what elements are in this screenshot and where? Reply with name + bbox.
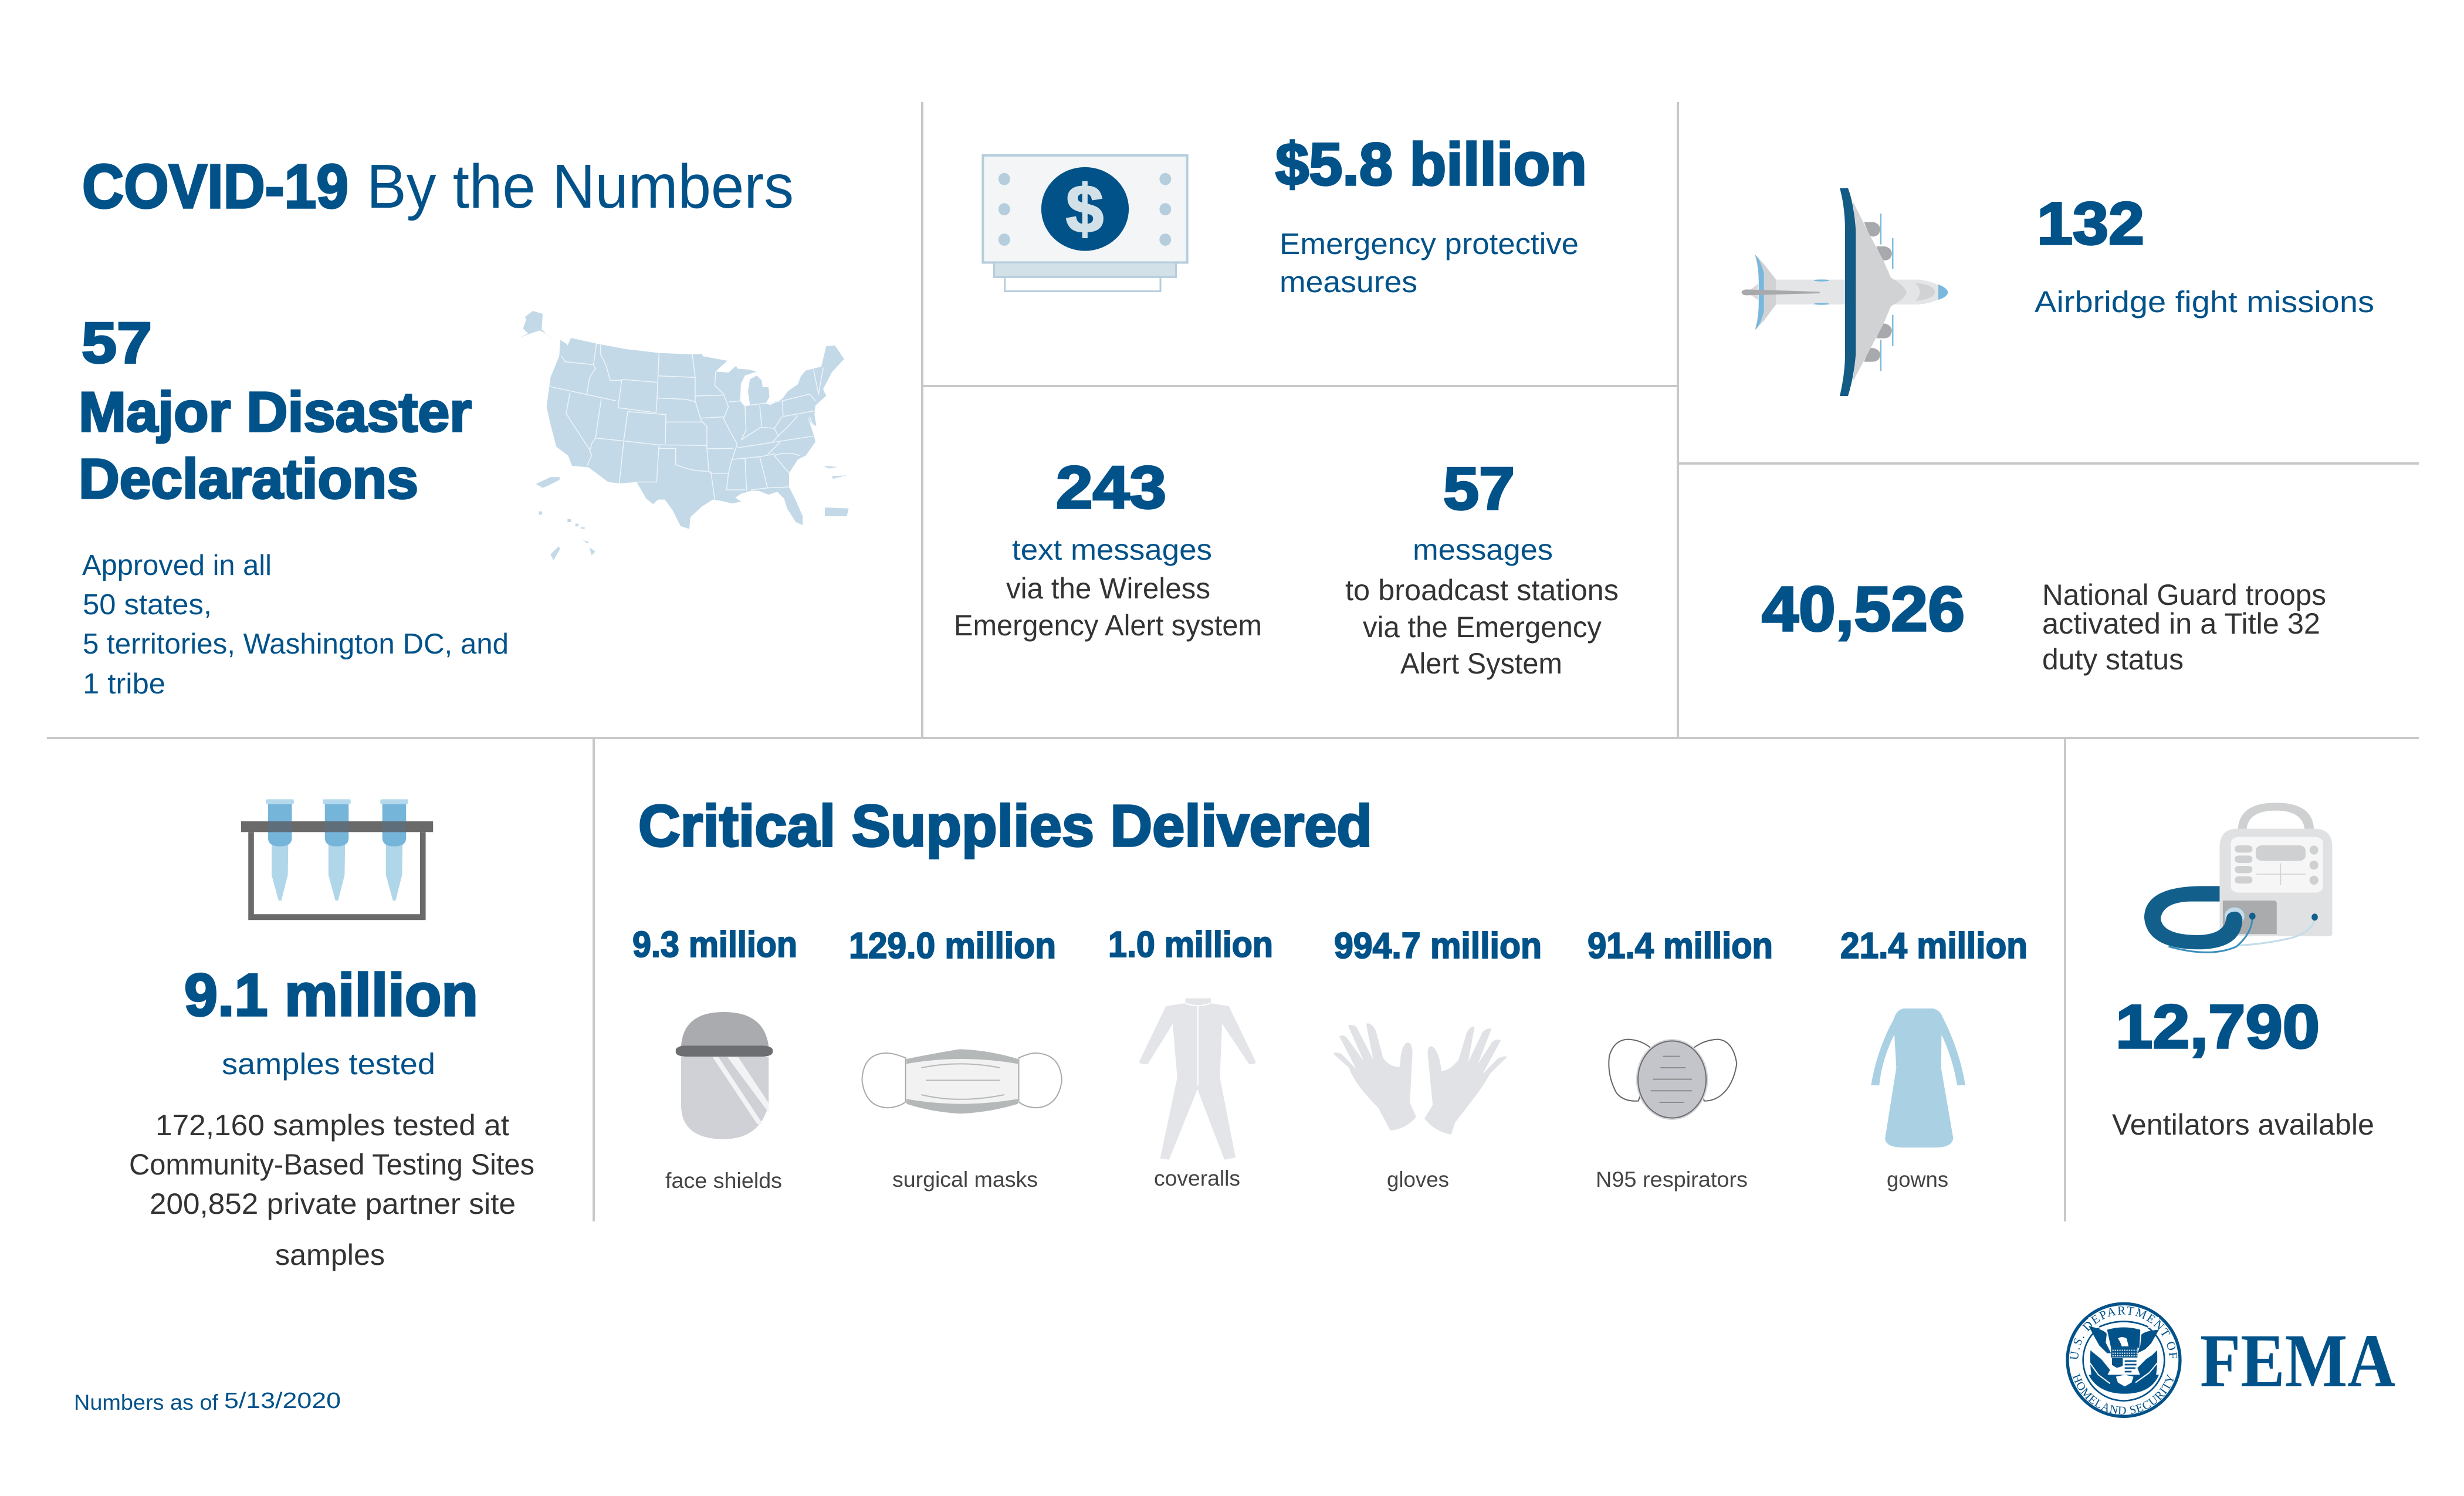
text block: sample details: 172,160 samples tested at <box>155 1109 509 1142</box>
stat: 57 major disaster declarations <box>79 310 472 510</box>
item: face shields: face shields <box>665 1169 782 1193</box>
text: samples tested: samples tested <box>222 1047 435 1081</box>
text: airbridge fight missions: Airbridge fight missions <box>2035 285 2374 319</box>
icon: N95 respirator <box>1609 1039 1737 1120</box>
icon: dollar bill <box>983 155 1187 291</box>
text block: approved in all: 50 states, <box>83 589 212 621</box>
icon: DHS seal: U.S. DEPARTMENT OF <box>2070 1306 2178 1359</box>
text block: national guard troops <box>2042 578 2326 676</box>
text block: sample details: Community-Based Testing Sites <box>129 1148 534 1181</box>
icon: dollar bill: $ <box>1066 172 1104 247</box>
text block: national guard troops: activated in a Title 32 <box>2042 607 2320 640</box>
text block: messages to broadcast stations: messages <box>1413 533 1553 566</box>
item: gowns: 21.4 million <box>1840 926 2028 966</box>
panel: airbridge flight missions <box>1741 188 2374 396</box>
item: gloves: gloves <box>1387 1167 1449 1192</box>
stat: 57: 57 <box>1443 455 1515 522</box>
item: surgical masks: 129.0 million <box>849 926 1056 966</box>
item: gloves: 994.7 million <box>1334 926 1542 966</box>
text block: text messages: via the Wireless <box>1006 572 1210 605</box>
text block: national guard troops: duty status <box>2042 643 2184 676</box>
icon: DHS seal <box>2066 1302 2182 1418</box>
item: face shields: 9.3 million <box>632 925 797 965</box>
stat: 40,526: 40,526 <box>1762 573 1965 644</box>
text block: messages to broadcast stations: Alert System <box>1400 647 1562 680</box>
title: By the Numbers <box>367 152 794 221</box>
item: coveralls: 1.0 million <box>1108 925 1273 965</box>
text block: national guard troops: National Guard troops <box>2042 578 2326 611</box>
logo: DHS seal and FEMA <box>2066 1302 2395 1418</box>
text block: sample details <box>129 1109 534 1271</box>
text block: text messages <box>954 533 1262 642</box>
wordmark: FEMA: FEMA <box>2200 1319 2395 1403</box>
icon: coveralls <box>1139 999 1256 1160</box>
panel: samples tested <box>129 799 534 1271</box>
stat: 57 major disaster declarations: 57 <box>82 310 152 375</box>
text block: approved in all: Approved in all <box>82 550 272 581</box>
stat: 12,790: 12,790 <box>2116 993 2320 1061</box>
item: N95 respirators: 91.4 million <box>1588 926 1773 966</box>
heading: critical supplies delivered: Critical Supplies Delivered <box>638 793 1372 859</box>
icon: face shield <box>676 1012 773 1139</box>
panel: ventilators <box>2112 803 2374 1141</box>
panel: national guard <box>1762 573 2326 676</box>
panel: major disaster declarations <box>79 310 849 700</box>
icon: US map <box>519 311 849 560</box>
item: surgical masks <box>849 926 1062 1192</box>
item: surgical masks: surgical masks <box>892 1167 1038 1192</box>
footnote: numbers as of date: Numbers as of <box>74 1390 219 1414</box>
text block: sample details: 200,852 private partner site <box>150 1187 516 1220</box>
item: N95 respirators <box>1588 926 1773 1192</box>
text block: approved in all: 5 territories, Washington DC, and <box>83 628 509 660</box>
text block: messages to broadcast stations: via the Emergency <box>1363 611 1602 644</box>
stat: 57 major disaster declarations: Declarations <box>79 448 418 510</box>
item: gloves <box>1333 926 1542 1192</box>
text block: text messages: text messages <box>1012 533 1212 566</box>
stat: $5.8 billion: $5.8 billion <box>1275 131 1587 198</box>
stat: 57 major disaster declarations: Major Disaster <box>79 381 472 444</box>
item: gowns: gowns <box>1887 1167 1948 1192</box>
panel: emergency protective measures <box>983 131 1587 299</box>
icon: gown <box>1871 1008 1965 1148</box>
title <box>82 152 794 221</box>
panel: broadcast messages <box>1345 455 1619 680</box>
title: COVID-19 <box>82 152 348 221</box>
item: coveralls: coveralls <box>1154 1166 1240 1190</box>
item: N95 respirators: N95 respirators <box>1596 1167 1748 1192</box>
text block: messages to broadcast stations <box>1345 533 1619 680</box>
item: gowns <box>1840 926 2028 1192</box>
footnote: numbers as of date <box>74 1389 341 1414</box>
stat: 9.1 million: 9.1 million <box>184 962 478 1028</box>
icon: gloves <box>1333 1023 1507 1135</box>
panel: critical supplies delivered <box>632 793 2028 1193</box>
text block: sample details: samples <box>275 1238 385 1271</box>
stat: 132: 132 <box>2037 190 2144 257</box>
icon: airplane <box>1741 188 1948 396</box>
text block: approved in all: 1 tribe <box>83 668 165 700</box>
footnote: numbers as of date: 5/13/2020 <box>224 1389 341 1413</box>
text block: approved in all <box>82 550 509 700</box>
panel: wireless emergency alerts <box>954 454 1262 642</box>
icon: ventilator <box>2144 803 2332 952</box>
icon: surgical mask <box>862 1049 1062 1113</box>
icon: test tubes <box>241 799 433 920</box>
text block: messages to broadcast stations: to broadcast stations <box>1345 574 1619 607</box>
text block: emergency protective measures: measures <box>1280 265 1417 299</box>
text block: text messages: Emergency Alert system <box>954 609 1262 642</box>
item: coveralls <box>1108 925 1273 1190</box>
text block: emergency protective measures: Emergency protective <box>1280 227 1579 260</box>
item: face shields <box>632 925 797 1193</box>
stat: 243: 243 <box>1056 454 1166 521</box>
icon: DHS seal: HOMELAND SECURITY <box>2072 1373 2174 1414</box>
text: ventilators available: Ventilators available <box>2112 1108 2374 1141</box>
text block: emergency protective measures <box>1280 227 1579 299</box>
